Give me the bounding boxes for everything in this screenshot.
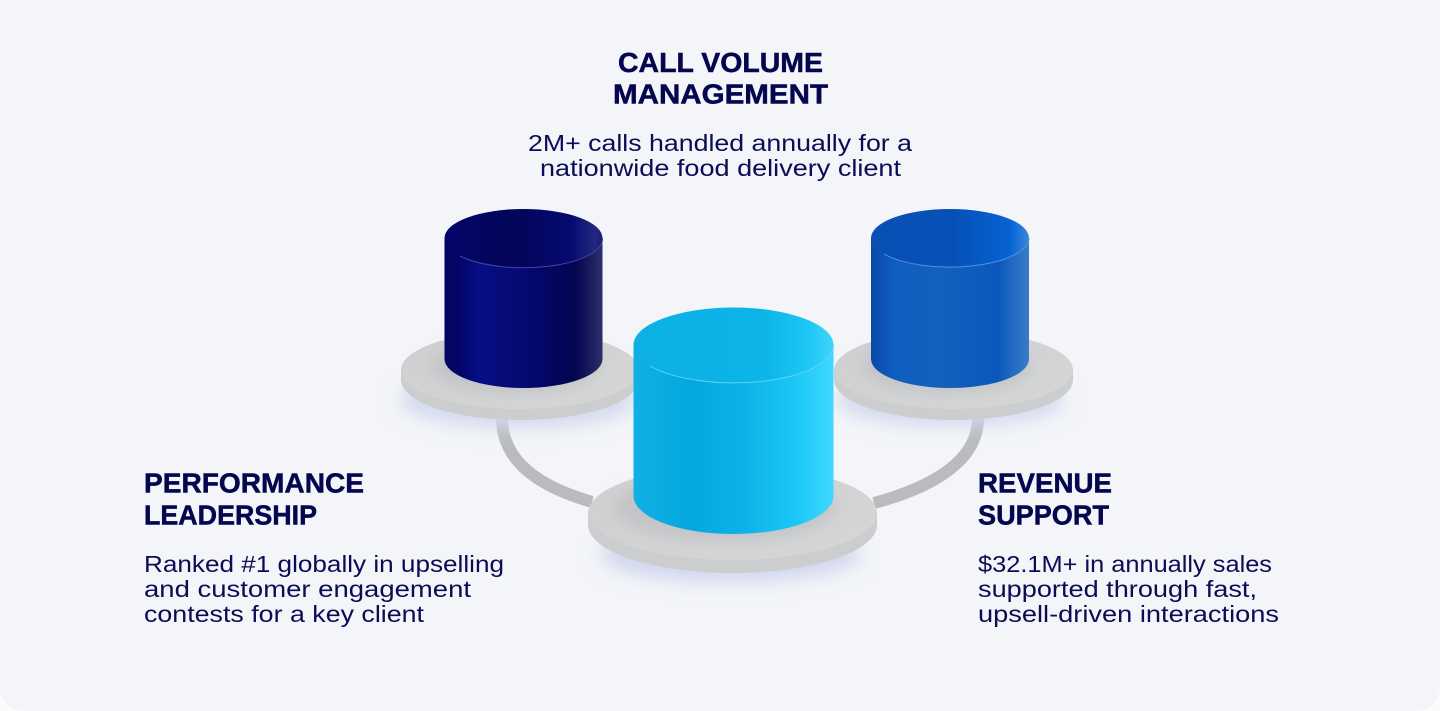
heading: call volume management bbox=[613, 47, 828, 110]
center platform and cyan cylinder bbox=[588, 308, 877, 582]
cylinder: blue bbox=[871, 209, 1029, 388]
description: performance: Ranked #1 globally in upselling bbox=[144, 551, 504, 577]
heading: performance leadership: PERFORMANCE bbox=[144, 468, 364, 498]
connector: left arc bbox=[502, 418, 592, 502]
heading: performance leadership bbox=[144, 468, 364, 530]
description: performance: contests for a key client bbox=[144, 601, 425, 627]
connector: right arc bbox=[874, 418, 978, 503]
heading: revenue support: SUPPORT bbox=[978, 500, 1109, 530]
description: revenue: upsell-driven interactions bbox=[978, 601, 1279, 627]
right platform and blue cylinder bbox=[834, 209, 1073, 426]
left platform and navy cylinder bbox=[400, 209, 639, 428]
plate: center bbox=[588, 466, 877, 573]
heading: performance leadership: LEADERSHIP bbox=[144, 500, 317, 530]
heading: call volume management: MANAGEMENT bbox=[613, 78, 828, 110]
heading: revenue support: REVENUE bbox=[978, 468, 1112, 498]
description: performance bbox=[144, 551, 504, 627]
heading: revenue support bbox=[978, 468, 1112, 530]
text block: call volume management bbox=[528, 47, 912, 181]
description: call volume: nationwide food delivery client bbox=[540, 155, 902, 181]
cylinder: navy bbox=[444, 209, 603, 388]
cylinder: cyan bbox=[634, 308, 834, 534]
description: revenue: supported through fast, bbox=[978, 576, 1257, 602]
text block: performance leadership bbox=[144, 468, 504, 627]
description: performance: and customer engagement bbox=[144, 576, 472, 602]
plate shadow: right bbox=[836, 374, 1064, 426]
plate shadow: left bbox=[400, 372, 636, 428]
text block: revenue support bbox=[978, 468, 1279, 627]
description: call volume: 2M+ calls handled annually for a bbox=[528, 130, 912, 156]
plate: left bbox=[401, 331, 639, 420]
description: revenue: $32.1M+ in annually sales bbox=[978, 551, 1272, 577]
heading: call volume management: CALL VOLUME bbox=[618, 47, 823, 78]
description: call volume bbox=[528, 130, 912, 181]
plate: right bbox=[834, 331, 1073, 420]
description: revenue bbox=[978, 551, 1279, 627]
plate shadow: center bbox=[600, 526, 860, 582]
